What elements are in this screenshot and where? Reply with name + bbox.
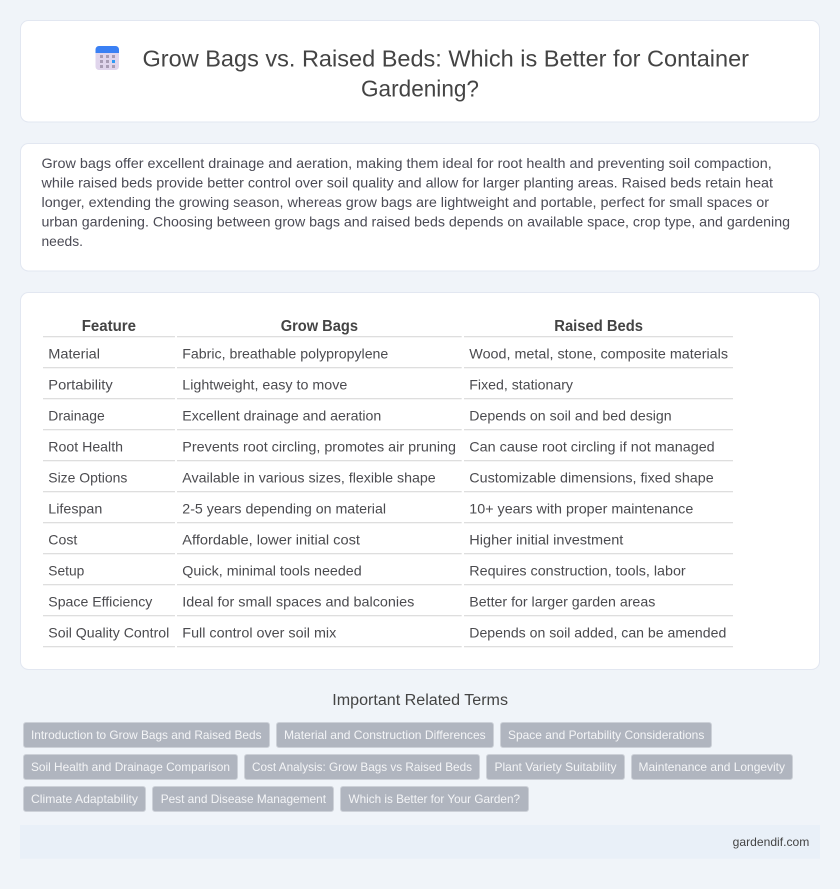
table row: drainage: Depends on soil and bed design [469,408,672,424]
table row: size options [43,470,733,492]
tag [24,786,146,812]
table header row: Feature [82,318,136,335]
table row: material: Material [48,346,100,362]
tag: Maintenance and Longevity [638,760,785,774]
table row: size options: Size Options [48,470,127,486]
tag: Climate Adaptability [31,792,138,806]
table row: material: Wood, metal, stone, composite materials [469,346,728,362]
text block: summary: needs. [42,233,83,249]
text block: summary: longer, extending the growing season, whereas grow bags are lightweight and portable, perfect for small spaces or [42,194,769,210]
table row: material [43,346,733,368]
text block: summary: urban gardening. Choosing between grow bags and raised beds depends on available space, crop type, and gardening [42,214,790,230]
tag [24,754,238,780]
table row: soil quality control: Depends on soil added, can be amended [469,624,726,640]
table row: cost: Affordable, lower initial cost [182,532,360,548]
table row: cost: Cost [48,532,77,548]
table row: portability: Fixed, stationary [469,376,573,392]
tag: Material and Construction Differences [284,728,486,742]
table row: lifespan: 2-5 years depending on material [182,500,386,516]
table row: root health [43,438,733,461]
table row: lifespan: 10+ years with proper maintenance [469,500,694,516]
table row: drainage: Excellent drainage and aeration [182,408,381,424]
tag: Space and Portability Considerations [508,728,704,742]
table row: drainage: Drainage [48,408,105,424]
table row: root health: Can cause root circling if not managed [469,438,715,454]
table header row [43,318,733,337]
tag: Which is Better for Your Garden? [348,792,520,806]
table row: size options: Available in various sizes, flexible shape [182,470,436,486]
title: Grow Bags vs. Raised Beds: Which is Better for Container [142,46,749,72]
table header row: Raised Beds [554,318,643,335]
table row: space efficiency: Ideal for small spaces and balconies [182,594,414,610]
table row: portability [43,376,733,399]
table row: space efficiency: Space Efficiency [48,594,152,610]
tag [340,786,528,812]
table row: portability: Lightweight, easy to move [182,376,348,392]
tag [276,722,494,748]
text block: summary: Grow bags offer excellent drainage and aeration, making them ideal for root health and preventing soil compaction, [42,155,772,171]
table row: size options: Customizable dimensions, fixed shape [469,470,714,486]
tag [24,722,270,748]
tag [500,722,712,748]
tag [152,786,334,812]
tag [486,754,624,780]
panel: related term tags [24,722,792,812]
table row: portability: Portability [48,376,113,392]
table row: space efficiency [43,594,733,616]
tag: Pest and Disease Management [161,792,327,806]
tag [244,754,480,780]
table row: setup [43,562,733,585]
text block: summary: while raised beds provide better control over soil quality and allow for larger planting areas. Raised beds retain heat [40,174,773,190]
footer: gardendif.com [733,835,809,849]
panel: summary paragraph [20,144,820,271]
tag: Soil Health and Drainage Comparison [31,760,230,774]
tag: Plant Variety Suitability [494,760,616,774]
table header row: Grow Bags [281,318,358,335]
table row: cost: Higher initial investment [469,532,623,548]
heading: related terms: Important Related Terms [332,692,508,709]
tag: Introduction to Grow Bags and Raised Beds [31,728,262,742]
title [142,46,749,102]
table row: lifespan [43,500,733,523]
table row: setup: Requires construction, tools, labor [469,562,686,578]
footer [20,825,820,859]
table row: space efficiency: Better for larger garden areas [469,594,655,610]
text block: summary [40,155,790,249]
panel: header [20,20,820,122]
table row: drainage [43,408,733,430]
panel: comparison table [20,292,820,670]
table row: setup: Quick, minimal tools needed [182,562,362,578]
table row: lifespan: Lifespan [48,500,102,516]
table row: soil quality control [43,624,733,647]
table row: material: Fabric, breathable polypropylene [182,346,389,362]
table row: root health: Prevents root circling, promotes air pruning [182,438,456,454]
title: Gardening? [361,76,479,102]
table row: soil quality control: Full control over soil mix [182,624,336,640]
tag [632,754,792,780]
table row: cost [43,532,733,554]
icon: calendar [96,46,119,70]
tag: Cost Analysis: Grow Bags vs Raised Beds [252,760,472,774]
table row: setup: Setup [48,562,85,578]
table row: root health: Root Health [48,438,123,454]
table row: soil quality control: Soil Quality Control [48,624,169,640]
